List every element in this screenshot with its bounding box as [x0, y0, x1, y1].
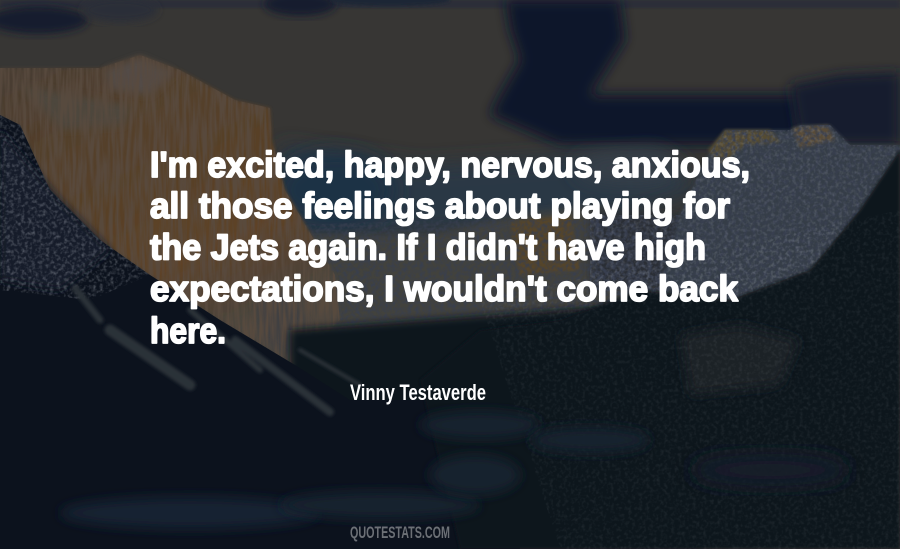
background: right mountain — [590, 120, 900, 310]
quote line 5: here. — [150, 310, 226, 351]
background: centre valley — [310, 206, 676, 326]
sky: dark storm cloud — [490, 0, 900, 145]
background: dark foreground slopes — [0, 115, 900, 549]
watermark: QUOTESTATS.COM — [350, 524, 450, 542]
background: snow streaks — [75, 288, 360, 412]
author name: Vinny Testaverde — [350, 380, 486, 405]
quote text — [150, 144, 750, 351]
quote line 3: the Jets again. If I didn't have high — [150, 226, 706, 268]
background: left cliff — [0, 50, 345, 370]
quote line 2: all those feelings about playing for — [150, 185, 730, 226]
background: valley mist — [60, 411, 850, 529]
quote line 4: expectations, I wouldn't come back — [150, 268, 739, 309]
quote line 1: I'm excited, happy, nervous, anxious, — [150, 144, 750, 185]
